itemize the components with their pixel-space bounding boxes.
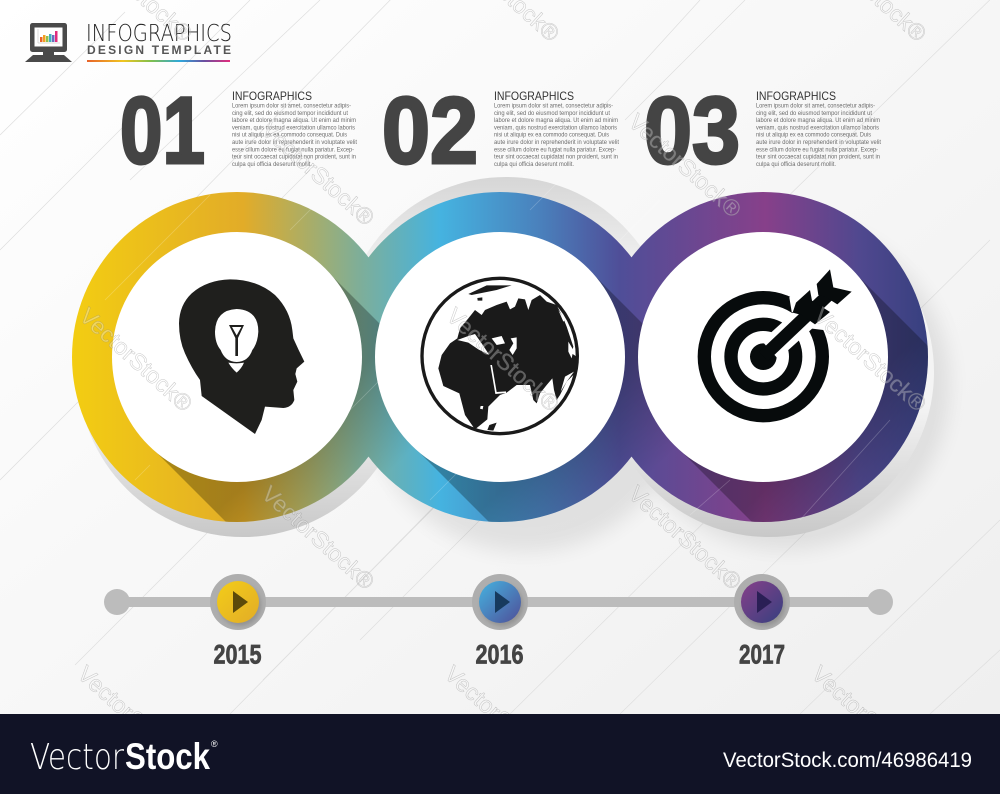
subtitle: DESIGN TEMPLATE [87,43,231,57]
text block 2: cing elit, sed do eiusmod tempor incididunt ut [494,110,610,117]
text block 2: labore et dolore magna aliqua. Ut enim ad minim [494,117,618,124]
text block 2 [494,89,619,168]
timeline node 2015 [210,574,266,630]
text block 1: INFOGRAPHICS [232,89,312,103]
year 2017: 2017 [739,640,785,670]
panel: white circle 2 [375,232,625,482]
panel: white circle 1 [112,232,362,482]
footer logo [30,736,218,778]
text block 1: esse cillum dolore eu fugiat nulla pariatur. Excep- [232,146,354,153]
watermarks: VectorStock® [442,302,565,417]
text block 3: nisi ut aliquip ex ea commodo consequat. Duis [756,132,871,139]
text block 1: aute irure dolor in reprehenderit in voluptate velit [232,139,357,146]
text block 1: labore et dolore magna aliqua. Ut enim ad minim [232,117,356,124]
title: INFOGRAPHICS [86,21,232,47]
text block 1: culpa qui officia deserunt mollit. [232,161,312,168]
text block 1 [232,89,357,168]
panel: white circle 3 [638,232,888,482]
text block 3: teur sint occaecat cupidatat non proident, sunt in [756,154,881,161]
icon: head with light bulb [179,279,304,434]
text block 2: aute irure dolor in reprehenderit in voluptate velit [494,139,619,146]
footer url: VectorStock.com/46986419 [723,749,972,772]
text block 2: Lorem ipsum dolor sit amet, consectetur adipis- [494,102,613,110]
watermarks: VectorStock® [809,302,932,417]
text block 3: labore et dolore magna aliqua. Ut enim ad minim [756,117,880,124]
footer bar [0,714,1000,794]
text block 2: culpa qui officia deserunt mollit. [494,161,574,168]
text block 3: culpa qui officia deserunt mollit. [756,161,836,168]
faint diagonal lines over rings [105,170,890,520]
text block 1: Lorem ipsum dolor sit amet, consectetur adipis- [232,102,351,110]
text block 2: teur sint occaecat cupidatat non proident, sunt in [494,154,619,161]
soft drop shadows behind rings [365,220,950,552]
number 03: 03 [644,78,740,184]
watermarks: VectorStock® [75,302,198,417]
number 01: 01 [120,78,205,184]
text block 1: veniam, quis nostrud exercitation ullamco laboris [232,124,355,131]
watermarks: VectorStock® [807,660,930,775]
text block 3: INFOGRAPHICS [756,89,836,103]
three linked coloured rings [72,192,928,522]
text block 2: INFOGRAPHICS [494,89,574,103]
footer logo: Stock [125,736,210,777]
text block 3: Lorem ipsum dolor sit amet, consectetur adipis- [756,102,875,110]
timeline [104,574,893,630]
text block 3 [756,89,881,168]
watermarks: VectorStock® [624,480,747,595]
footer logo: ® [211,739,218,749]
number 02: 02 [382,78,478,184]
text block 3: veniam, quis nostrud exercitation ullamco laboris [756,124,879,131]
logo icon: monitor with chart [25,23,72,62]
timeline node 2016 [472,574,528,630]
crescent shadows [78,177,934,537]
year 2015: 2015 [214,640,262,670]
watermarks: VectorStock® [440,660,563,775]
text block 3: cing elit, sed do eiusmod tempor incididunt ut [756,110,872,117]
watermarks: VectorStock® [257,480,380,595]
text block 1: cing elit, sed do eiusmod tempor incididunt ut [232,110,348,117]
text block 1: nisi ut aliquip ex ea commodo consequat. Duis [232,132,347,139]
text block 3: aute irure dolor in reprehenderit in voluptate velit [756,139,881,146]
text block 2: nisi ut aliquip ex ea commodo consequat. Duis [494,132,609,139]
text block 2: veniam, quis nostrud exercitation ullamco laboris [494,124,617,131]
year 2016: 2016 [476,640,524,670]
text block 1: teur sint occaecat cupidatat non proident, sunt in [232,154,357,161]
footer logo: Vector [30,737,124,778]
icon: globe [422,278,577,434]
watermarks: VectorStock® [624,108,747,223]
timeline node 2017 [734,574,790,630]
text block 2: esse cillum dolore eu fugiat nulla pariatur. Excep- [494,146,616,153]
icon: target with arrow [704,263,853,416]
watermarks: VectorStock® [257,116,380,231]
text block 3: esse cillum dolore eu fugiat nulla pariatur. Excep- [756,146,878,153]
watermarks: VectorStock® [73,660,196,775]
long shadows on rings [156,276,928,522]
rainbow rule [87,60,230,62]
